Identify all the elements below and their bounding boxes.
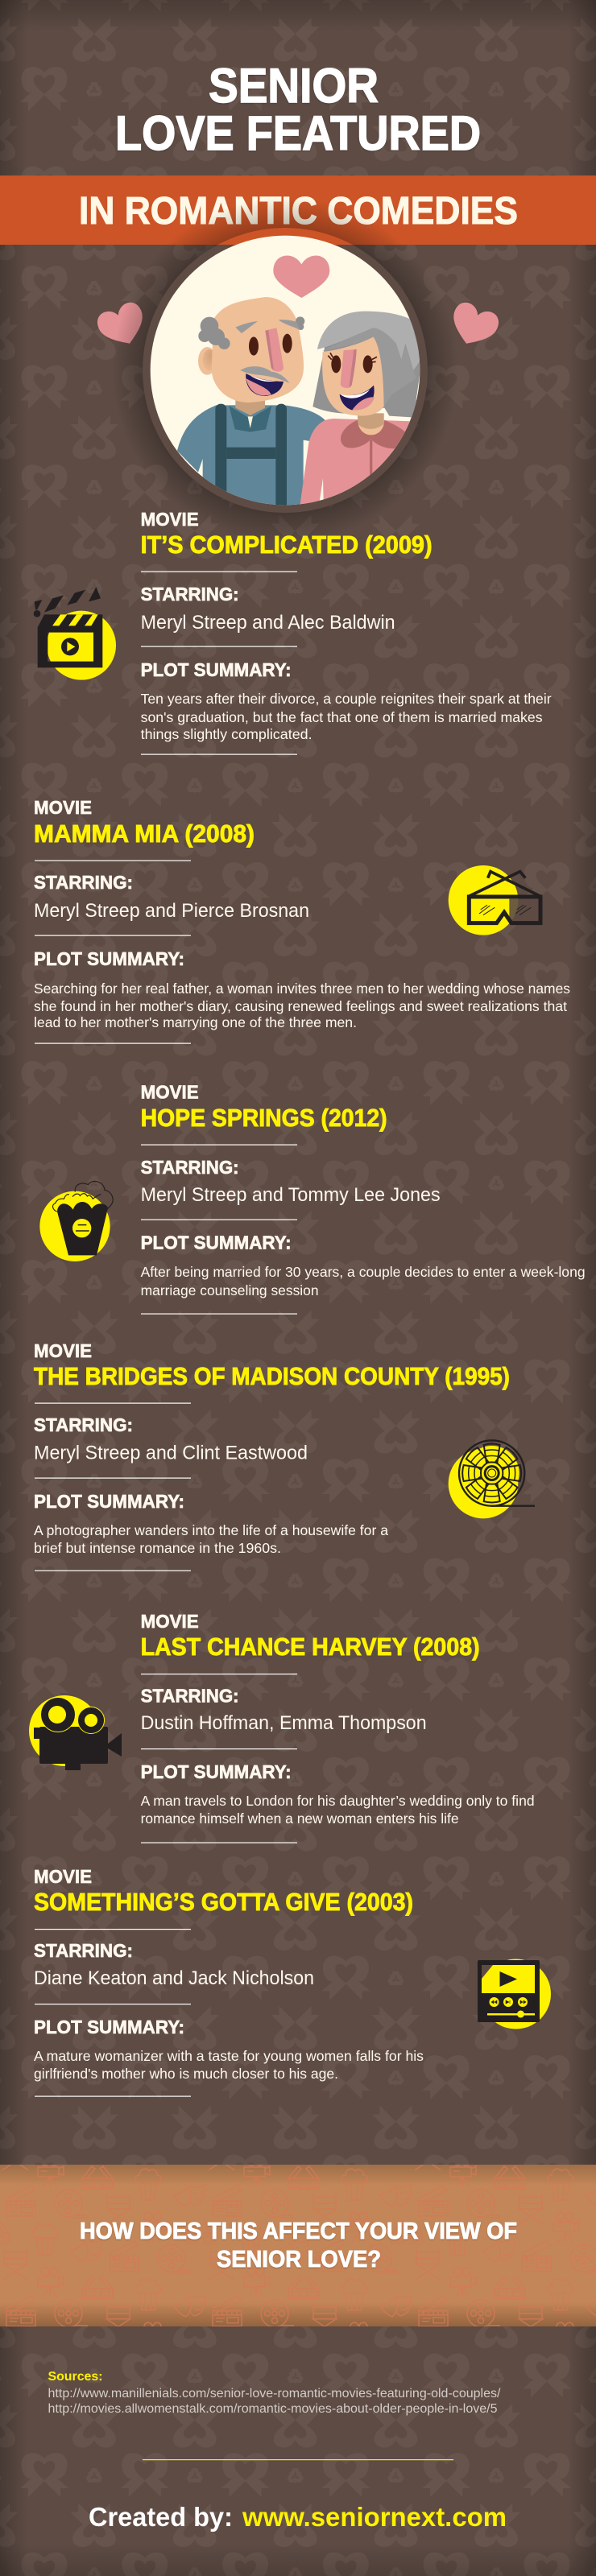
call to action question: SENIOR LOVE? (217, 2247, 381, 2273)
section: Mamma Mia (34, 797, 570, 1044)
icon: clapperboard (34, 587, 116, 680)
section: Last Chance Harvey (141, 1611, 535, 1843)
section: Something's Gotta Give: PLOT SUMMARY: (34, 2017, 184, 2037)
woman eyes (331, 355, 341, 373)
man moustache (240, 366, 289, 383)
woman neck (358, 413, 384, 435)
section: It's Complicated: PLOT SUMMARY: (141, 659, 292, 680)
icon: right heart (445, 299, 502, 352)
woman cardigan (300, 419, 413, 510)
section: Something's Gotta Give: girlfriend's mother who is much closer to his age. (34, 2066, 338, 2082)
woman back hair (312, 314, 421, 418)
icon: movie camera (29, 1695, 122, 1770)
section: Last Chance Harvey: LAST CHANCE HARVEY (2008) (141, 1633, 480, 1661)
section: Mamma Mia: Searching for her real father, a woman invites three men to her wedding whose names (34, 980, 570, 997)
credit (89, 2502, 507, 2532)
section: Something's Gotta Give: Diane Keaton and Jack Nicholson (34, 1967, 314, 1989)
section: The Bridges of Madison County: PLOT SUMMARY: (34, 1491, 184, 1512)
icon: video player (478, 1959, 551, 2029)
man neck (235, 400, 265, 415)
section: Last Chance Harvey: A man travels to London for his daughter’s wedding only to find (141, 1793, 535, 1809)
section: Hope Springs: HOPE SPRINGS (2012) (141, 1104, 387, 1132)
man collar (229, 406, 271, 432)
icon: left heart (94, 299, 151, 352)
sources: http://movies.allwomenstalk.com/romantic-movies-about-older-people-in-love/5 (48, 2402, 498, 2416)
call to action question (80, 2219, 517, 2273)
section: Hope Springs: MOVIE (141, 1082, 199, 1103)
section: The Bridges of Madison County: MOVIE (34, 1340, 92, 1361)
section: Mamma Mia: STARRING: (34, 872, 133, 893)
section: The Bridges of Madison County: brief but intense romance in the 1960s. (34, 1540, 281, 1556)
section: The Bridges of Madison County: Meryl Streep and Clint Eastwood (34, 1443, 308, 1463)
section: Something's Gotta Give: MOVIE (34, 1866, 92, 1887)
credit: www.seniornext.com (242, 2502, 507, 2532)
man head (212, 297, 304, 402)
section: It's Complicated (141, 509, 552, 755)
sources (48, 2370, 501, 2416)
icon: top heart (273, 255, 329, 298)
title (115, 59, 481, 160)
icon: popcorn (39, 1181, 113, 1261)
woman nose (341, 349, 357, 388)
illustration: senior couple portrait (112, 197, 458, 543)
woman face (322, 336, 384, 416)
panel: call to action band (0, 2165, 596, 2326)
section: Hope Springs: marriage counseling session (141, 1282, 319, 1298)
woman fringe (317, 312, 421, 370)
sources: http://www.manillenials.com/senior-love-romantic-movies-featuring-old-couples/ (48, 2387, 501, 2401)
title: SENIOR (209, 59, 379, 113)
icon: film reel (449, 1440, 535, 1518)
section: The Bridges of Madison County: A photographer wanders into the life of a housewife for a (34, 1522, 388, 1538)
title: LOVE FEATURED (115, 106, 481, 160)
man hair (198, 316, 304, 349)
icon: 3D glasses (449, 865, 540, 935)
section: It's Complicated: son's graduation, but the fact that one of them is married makes (141, 709, 543, 725)
section: Something's Gotta Give: STARRING: (34, 1940, 133, 1961)
section: Mamma Mia: MAMMA MIA (2008) (34, 819, 255, 848)
section: Hope Springs: PLOT SUMMARY: (141, 1232, 292, 1253)
section: It's Complicated: IT’S COMPLICATED (2009) (141, 530, 433, 559)
section: Something's Gotta Give: SOMETHING’S GOTTA GIVE (2003) (34, 1888, 413, 1916)
man eyes (249, 336, 259, 356)
section: Mamma Mia: Meryl Streep and Pierce Brosnan (34, 900, 309, 922)
section: Hope Springs (141, 1082, 586, 1315)
section: It's Complicated: MOVIE (141, 509, 199, 530)
section: The Bridges of Madison County: THE BRIDGES OF MADISON COUNTY (1995) (34, 1362, 510, 1390)
man ear (198, 347, 213, 375)
call to action question: HOW DOES THIS AFFECT YOUR VIEW OF (80, 2219, 517, 2244)
section: Hope Springs: Meryl Streep and Tommy Lee Jones (141, 1184, 441, 1206)
section: It's Complicated: things slightly complicated. (141, 726, 312, 742)
section: It's Complicated: STARRING: (141, 584, 239, 605)
section: It's Complicated: Meryl Streep and Alec Baldwin (141, 612, 395, 634)
section: Mamma Mia: she found in her mother's diary, causing renewed feelings and sweet realizations that (34, 998, 567, 1014)
section: The Bridges of Madison County: STARRING: (34, 1414, 133, 1435)
section: It's Complicated: Ten years after their divorce, a couple reignites their spark at their (141, 691, 552, 707)
subtitle band: IN ROMANTIC COMEDIES (79, 190, 518, 233)
section: Hope Springs: After being married for 30 years, a couple decides to enter a week-long (141, 1264, 586, 1280)
section: Last Chance Harvey: STARRING: (141, 1686, 239, 1707)
divider line (143, 2459, 453, 2460)
woman mouth (340, 386, 375, 410)
section: Last Chance Harvey: romance himself when a new woman enters his life (141, 1810, 459, 1827)
section: Something's Gotta Give: A mature womanizer with a taste for young women falls for his (34, 2048, 424, 2064)
sources: Sources: (48, 2370, 103, 2384)
man nose (265, 328, 284, 372)
section: The Bridges of Madison County (34, 1340, 510, 1571)
credit: Created by: (89, 2502, 233, 2532)
section: Mamma Mia: lead to her mother's marrying one of the three men. (34, 1014, 357, 1030)
section: Last Chance Harvey: PLOT SUMMARY: (141, 1761, 292, 1782)
section: Hope Springs: STARRING: (141, 1157, 239, 1178)
woman collar (341, 420, 405, 448)
section: Mamma Mia: MOVIE (34, 797, 92, 818)
subtitle band (0, 175, 596, 245)
man mouth (246, 374, 284, 396)
man eyebrows (235, 320, 300, 333)
suspenders (215, 404, 287, 510)
section: Last Chance Harvey: MOVIE (141, 1611, 199, 1632)
man shirt (177, 405, 328, 510)
section: Mamma Mia: PLOT SUMMARY: (34, 948, 184, 969)
section: Last Chance Harvey: Dustin Hoffman, Emma Thompson (141, 1712, 427, 1734)
section: Something's Gotta Give (34, 1866, 424, 2097)
